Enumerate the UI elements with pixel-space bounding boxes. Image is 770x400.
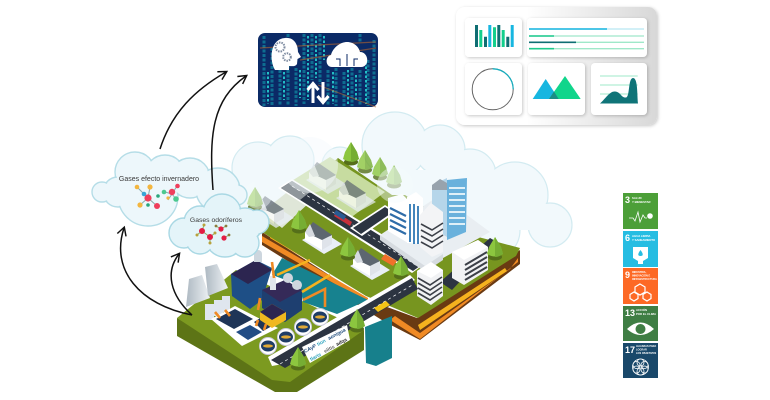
building plot xyxy=(380,195,490,268)
orange pipes xyxy=(215,262,325,330)
white sponsor sign: elitis xyxy=(323,344,336,355)
cross road xyxy=(350,205,396,236)
SDG 17: LOGRAR xyxy=(636,348,647,352)
block E xyxy=(452,240,488,285)
SDG 9: INNOVACIÓN E xyxy=(632,274,650,278)
vehicles xyxy=(334,212,352,226)
SDG 9: 9 xyxy=(625,270,630,280)
front road xyxy=(268,275,415,366)
ring card xyxy=(465,63,522,115)
SDG 13: ACCIÓN xyxy=(636,307,647,312)
block F xyxy=(417,262,443,305)
city island xyxy=(247,142,520,340)
arrow: plant to odour cloud xyxy=(171,254,192,315)
molecule icons xyxy=(196,224,230,244)
icon: head with gears xyxy=(272,38,301,70)
SDG 3: SALUD xyxy=(632,196,642,200)
SDG 6: Y SANEAMIENTO xyxy=(632,238,656,242)
SDG 17 xyxy=(623,343,658,378)
treatment plant island xyxy=(177,250,418,392)
cooling towers xyxy=(186,275,210,307)
SDG goal tiles xyxy=(623,193,658,378)
island top surface xyxy=(262,158,520,318)
label: Gases efecto invernadero xyxy=(119,176,199,183)
SDG 9: INDUSTRIA, xyxy=(632,271,647,274)
white sponsor sign: aonigua xyxy=(327,327,347,342)
plant trees xyxy=(290,347,306,370)
SDG 6: AGUA LIMPIA xyxy=(632,234,650,238)
cloud: gases odoriferos xyxy=(169,194,269,257)
bar chart card xyxy=(465,18,522,57)
data panel xyxy=(258,33,378,107)
SDG 3 xyxy=(623,193,658,229)
tower B xyxy=(407,192,423,244)
SDG 6 xyxy=(623,231,658,267)
cloud: gases efecto invernadero xyxy=(92,152,247,226)
SDG 13 xyxy=(623,306,658,341)
trees xyxy=(343,142,359,166)
storage tanks xyxy=(205,296,230,320)
white sponsor sign: tion xyxy=(316,338,327,348)
background clouds behind the city xyxy=(220,112,572,260)
SDG 17: LOS OBJETIVOS xyxy=(636,352,656,355)
white sponsor sign: tlaris xyxy=(309,352,323,363)
water canal xyxy=(272,258,368,314)
light ground under the faded houses xyxy=(290,157,385,222)
icon: cloud network xyxy=(327,42,367,67)
progress lines card xyxy=(527,18,647,57)
arrow: plant to greenhouse cloud xyxy=(121,228,192,315)
SDG 13: POR EL CLIMA xyxy=(636,312,656,316)
round clarifiers xyxy=(260,338,276,354)
white sponsor sign: adqa xyxy=(335,337,348,348)
label: Gases odoríferos xyxy=(190,217,243,224)
molecule icons xyxy=(135,184,180,209)
white sponsor sign xyxy=(302,325,350,363)
houses xyxy=(254,196,294,228)
settling basins xyxy=(211,306,278,346)
white sponsor sign: CAyP xyxy=(303,343,318,355)
main road xyxy=(278,179,427,273)
right road xyxy=(440,238,497,290)
plant buildings xyxy=(231,260,272,309)
tower C xyxy=(420,203,443,257)
SDG 3: Y BIENESTAR xyxy=(632,200,651,204)
island body xyxy=(177,318,364,392)
SDG 3: 3 xyxy=(625,195,630,205)
arrow: odorous gases to data xyxy=(212,76,246,190)
SDG 9 xyxy=(623,268,658,304)
SDG 6: 6 xyxy=(625,233,630,243)
SDG 17: 17 xyxy=(625,345,635,355)
triangles card xyxy=(528,63,585,115)
tower D xyxy=(432,178,467,240)
icon: up and down arrows xyxy=(308,82,328,103)
island side: soil and pipes xyxy=(262,232,520,340)
SDG 17: ALIANZAS PARA xyxy=(636,345,656,348)
tower A xyxy=(388,194,408,243)
cloud haze over the back of the city xyxy=(244,137,413,209)
arrow: greenhouse gases to data xyxy=(160,72,226,149)
area chart card xyxy=(591,63,647,115)
SDG 9: INFRAESTRUCTURA xyxy=(632,278,657,281)
dashboard panel xyxy=(456,7,657,125)
SDG 13: 13 xyxy=(625,308,635,318)
